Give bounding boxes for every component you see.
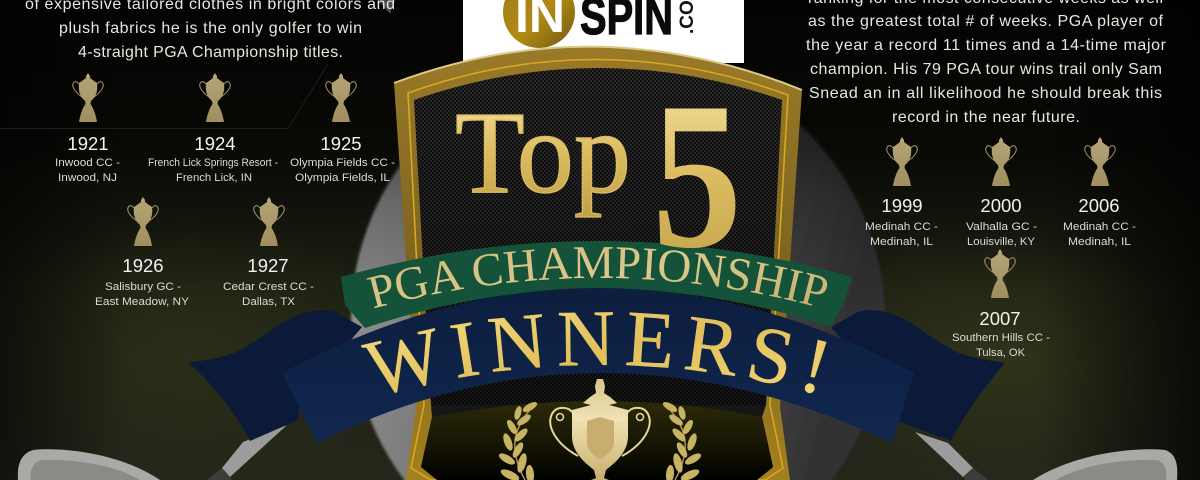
panel: left winner [25, 0, 395, 308]
panel: right winner [806, 0, 1167, 359]
title: 1921 [55, 73, 120, 184]
text block: right biography: the year a record 11 times and a 14-time major [806, 37, 1167, 54]
heading: Top 5: Top [455, 87, 631, 218]
golf ball [350, 52, 886, 480]
title: 2000: Louisville, KY [967, 236, 1035, 248]
title: 1924 [148, 73, 278, 184]
heading: Top 5 [455, 60, 742, 292]
heading: Winners: WINNERS! [361, 312, 826, 394]
title: 1927: Cedar Crest CC - [223, 281, 314, 293]
title: 2006: Medinah CC - [1063, 221, 1136, 233]
title: 1926 [95, 197, 189, 308]
icon: golf club right [915, 432, 1177, 480]
title: 1925: Olympia Fields CC - [290, 157, 395, 169]
text block: right biography: champion. His 79 PGA tour wins trail only Sam [810, 61, 1162, 78]
title: 1925 [290, 73, 395, 184]
title: 1924: 1924 [194, 133, 236, 154]
title: 2000: Valhalla GC - [966, 221, 1037, 233]
title: 1926: East Meadow, NY [95, 296, 189, 308]
logo: InSpin.com [463, 0, 744, 63]
title: 1927: 1927 [247, 255, 289, 276]
title: 2006: 2006 [1078, 195, 1120, 216]
title: 1926: 1926 [122, 255, 164, 276]
title: 1921: Inwood, NJ [58, 172, 117, 184]
title: 2006 [1063, 137, 1136, 248]
panel: ribbon tails [188, 310, 1005, 441]
title: 1999 [865, 137, 938, 248]
title: 2007: Southern Hills CC - [952, 332, 1050, 344]
heading: Top 5: 5 [652, 60, 742, 292]
title: 2000: 2000 [980, 195, 1022, 216]
text block: left biography [25, 0, 395, 61]
title: 1999: Medinah CC - [865, 221, 938, 233]
panel: shield [394, 47, 802, 480]
banner: green [341, 241, 852, 328]
icon: laurel right [661, 400, 703, 480]
text block: left biography: 4-straight PGA Championship titles. [78, 44, 343, 61]
icon: large trophy [550, 379, 650, 480]
title: 2007: Tulsa, OK [976, 347, 1026, 359]
text block: left biography: plush fabrics he is the only golfer to win [59, 20, 362, 37]
title: 1925: Olympia Fields, IL [295, 172, 390, 184]
text block: right biography: as the greatest total # of weeks. PGA player of [808, 13, 1164, 30]
title: 2007 [952, 249, 1050, 359]
title: 2000 [966, 137, 1037, 248]
title: 1927: Dallas, TX [242, 296, 295, 308]
title: 1999: Medinah, IL [870, 236, 933, 248]
title: 1999: 1999 [881, 195, 923, 216]
title: 1924: French Lick Springs Resort - [148, 157, 278, 169]
icon: laurel left [497, 400, 539, 480]
title: 1927 [223, 197, 314, 308]
title: 2006: Medinah, IL [1068, 236, 1131, 248]
text block: right biography [806, 0, 1167, 126]
title: 1926: Salisbury GC - [105, 281, 181, 293]
title: 2007: 2007 [979, 308, 1021, 329]
title: 1925: 1925 [320, 133, 362, 154]
text block: right biography: record in the near future. [892, 109, 1080, 126]
text block: right biography: Snead an in all likelihood he should break this [809, 85, 1162, 102]
icon: golf club left [18, 425, 287, 480]
title: 1924: French Lick, IN [176, 172, 252, 184]
title: 1921: Inwood CC - [55, 157, 120, 169]
banner: navy [282, 288, 914, 443]
heading: PGA Championship: PGA CHAMPIONSHIP [366, 247, 828, 308]
title: 1921: 1921 [67, 133, 109, 154]
